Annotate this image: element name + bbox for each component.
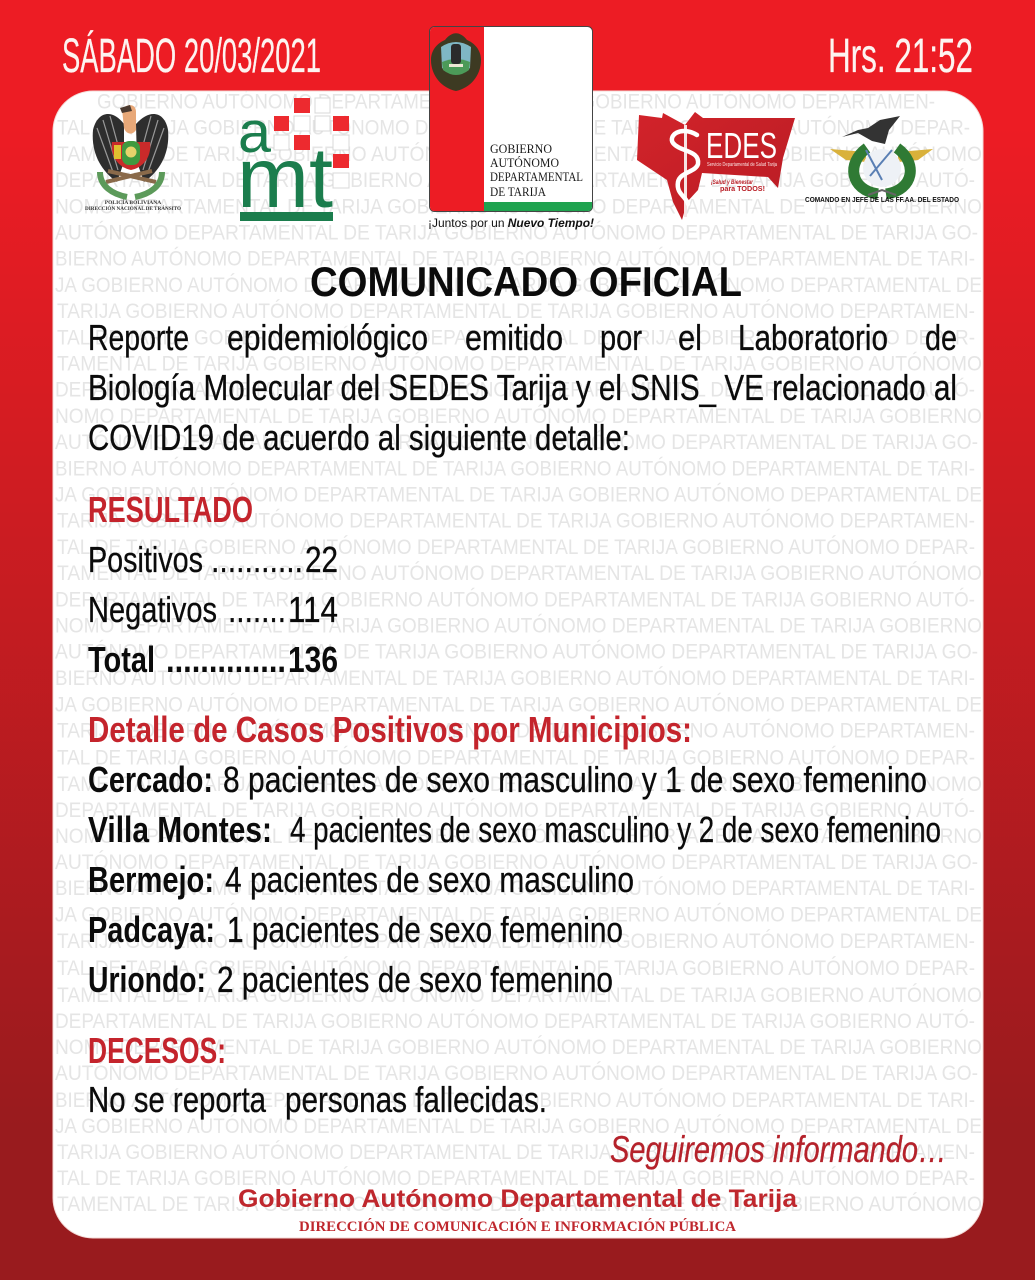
logo: SEDES: EDES [706,125,777,166]
logo: Policía Boliviana eagle [85,105,182,212]
results list: 114 [288,589,338,630]
heading: decesos: DECESOS: [88,1030,226,1071]
logo: Comando en Jefe de las FF.AA.: COMANDO EN JEFE DE LAS FF.AA. DEL ESTADO [805,195,959,204]
results list: .............. [166,639,286,680]
intro paragraph: emitido [465,317,563,358]
title: COMUNICADO OFICIAL [310,258,742,305]
municipality details: Villa Montes: [88,809,272,850]
municipality details: Cercado: [88,759,213,800]
intro paragraph: COVID19 de acuerdo al siguiente detalle: [88,417,630,458]
municipality details: Padcaya: [88,909,215,950]
watermark text pattern [55,88,982,1216]
date heading: SÁBADO 20/03/2021 [62,30,321,83]
logo: Comando en Jefe de las FF.AA. [805,116,959,204]
label: policia [85,198,182,212]
heading: resultado: RESULTADO [88,489,253,530]
intro paragraph: de [925,317,957,358]
results list: Positivos [88,539,203,580]
watermark text pattern: GOBIERNO AUTÓNOMO DEPARTAMENTAL DE TARIJA GOBIERNO AUTÓNOMO DEPARTAMEN- [97,88,935,114]
deaths statement [88,1079,547,1120]
municipality details [88,759,941,1000]
slogan: ¡Juntos por un Nuevo Tiempo! [428,218,594,230]
municipality details: 4 pacientes de sexo masculino [225,859,634,900]
results list: 136 [288,639,338,680]
label: government name: DE TARIJA [490,184,547,199]
logo: AMT: mt [237,131,333,226]
footer: department name: DIRECCIÓN DE COMUNICACIÓN E INFORMACIÓN PÚBLICA [299,1218,736,1235]
label: policia: POLICÍA BOLIVIANA [105,198,161,206]
intro paragraph: epidemiológico [227,317,428,358]
heading: detalle por municipios: Detalle de Casos Positivos por Municipios: [88,709,692,750]
label: government name: DEPARTAMENTAL [490,169,583,184]
logo: AMT: a [238,100,272,165]
label: government name [490,141,583,199]
icon: Tarija coat of arms [431,33,481,91]
intro paragraph: Laboratorio [738,317,888,358]
intro paragraph [88,317,957,458]
logo: SEDES [637,112,795,220]
closing note: Seguiremos informando… [610,1129,947,1170]
logo: SEDES: para TODOS! [720,184,765,193]
logo: AMT [237,98,349,226]
intro paragraph: por [600,317,642,358]
municipality details: 2 pacientes de sexo femenino [217,959,613,1000]
deaths statement: No se reporta [88,1079,267,1120]
label: policia: DIRECCIÓN NACIONAL DE TRÁNSITO [85,204,182,212]
footer: organisation name: Gobierno Autónomo Departamental de Tarija [238,1185,798,1213]
label: government name: GOBIERNO [490,141,552,156]
results list: Total [88,639,155,680]
logo: SEDES: Servicio Departamental de Salud Tarija [707,162,777,168]
intro paragraph: el [678,317,702,358]
results list: 22 [305,539,338,580]
logo: SEDES: ¡Salud y Bienestar [711,179,753,186]
results list: ....... [228,589,286,630]
municipality details: 1 pacientes de sexo femenino [227,909,623,950]
logo: Gobierno Autónomo Departamental de Tarija [428,26,594,230]
deaths statement: personas fallecidas. [285,1079,547,1120]
results list: Negativos [88,589,217,630]
results list: ........... [211,539,303,580]
intro paragraph: Reporte [88,317,189,358]
label: government name: AUTÓNOMO [490,155,559,170]
results list [88,539,338,680]
municipality details: Uriondo: [88,959,206,1000]
municipality details: Bermejo: [88,859,214,900]
